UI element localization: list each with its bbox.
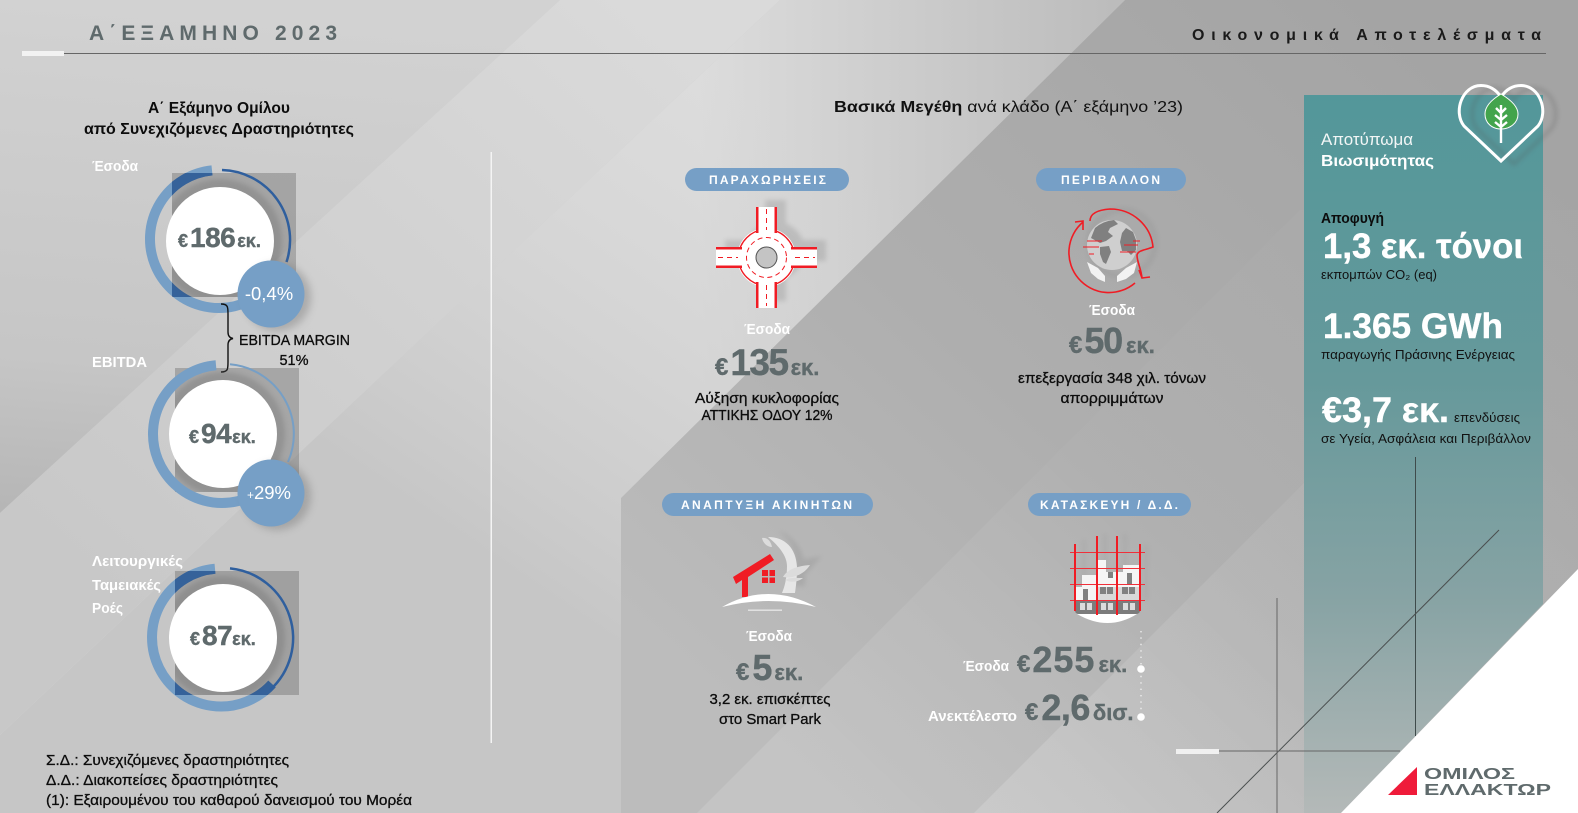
center heading: Βασικά Μεγέθη ανά κλάδο (Α΄ εξάμηνο ’23) [834, 99, 1183, 116]
logo: Ellaktor group: ΟΜΙΛΟΣ [1424, 766, 1516, 783]
left column heading: Α΄ Εξάμηνο Ομίλου [148, 100, 290, 117]
stat: investments [1321, 391, 1531, 446]
header: left title: Α΄ΕΞΑΜΗΝΟ 2023 [89, 22, 337, 45]
metric: EBITDA ring [92, 354, 311, 530]
left column heading [84, 100, 354, 138]
stat: investments: €3,7 εκ. [1322, 391, 1449, 430]
stat: green energy [1321, 307, 1515, 362]
progress ring [153, 365, 264, 503]
teal background [1304, 95, 1543, 813]
stat: investments: σε Υγεία, Ασφάλεια και Περιβάλλον [1321, 431, 1531, 446]
backlog value: €2,6δισ. [1025, 687, 1134, 728]
thin arc [230, 568, 293, 690]
value: €94εκ. [189, 418, 256, 449]
thin arc [222, 170, 290, 262]
description [1018, 370, 1206, 407]
white disc [169, 584, 277, 692]
panel: real estate [662, 493, 873, 728]
label [92, 553, 183, 617]
panel: construction [928, 493, 1191, 728]
description: ΑΤΤΙΚΗΣ ΟΔΟΥ 12% [702, 407, 832, 424]
description: 3,2 εκ. επισκέπτες [710, 691, 830, 708]
stat: avoided emissions: Αποφυγή [1321, 211, 1384, 227]
label: Έσοδα [92, 158, 139, 175]
stat: green energy: παραγωγής Πράσινης Ενέργειας [1321, 347, 1515, 362]
metric: operating cash flow ring [92, 553, 299, 706]
footnotes: Δ.Δ.: Διακοπείσες δραστηριότητες [46, 772, 278, 789]
label: Λειτουργικές [92, 553, 183, 570]
footnotes: (1): Εξαιρουμένου του καθαρού δανεισμού του Μορέα [46, 792, 412, 809]
panel title [1321, 131, 1434, 170]
label: Ροές [92, 600, 123, 617]
logo: Ellaktor group [1388, 766, 1551, 799]
backlog label: Ανεκτέλεστο [928, 708, 1017, 725]
icon: roundabout [716, 200, 826, 308]
revenue value: €255εκ. [1017, 639, 1127, 680]
badge: +29% [247, 482, 291, 503]
revenue label: Έσοδα [963, 658, 1010, 675]
value: €5εκ. [736, 647, 803, 688]
pill: ΚΑΤΑΣΚΕΥΗ / Δ.Δ. [1040, 498, 1178, 512]
grey square [175, 571, 299, 695]
panel: concessions [685, 168, 849, 424]
header: right title: Οικονομικά Αποτελέσματα [1192, 27, 1541, 44]
vertical divider [490, 152, 492, 743]
icon: heart with leaf [1459, 86, 1556, 164]
stat: investments: επενδύσεις [1454, 410, 1520, 425]
value: €135εκ. [715, 342, 819, 383]
label: Έσοδα [746, 628, 793, 645]
stat: avoided emissions: εκπομπών CO₂ (eq) [1321, 267, 1437, 282]
grey square [175, 368, 299, 492]
left column heading: από Συνεχιζόμενες Δραστηριότητες [84, 121, 354, 138]
white disc [169, 380, 277, 488]
EBITDA margin brace and label: EBITDA MARGIN [239, 332, 350, 349]
label: EBITDA [92, 354, 147, 371]
icon: building under construction [1070, 534, 1146, 623]
icon: house and leaf [722, 530, 822, 611]
description: επεξεργασία 348 χιλ. τόνων [1018, 370, 1206, 387]
description: Αύξηση κυκλοφορίας [695, 390, 839, 407]
badge [238, 260, 311, 331]
panel title: Αποτύπωμα [1321, 131, 1413, 149]
label: Έσοδα [1089, 302, 1136, 319]
footnotes [46, 752, 412, 809]
panel title: Βιωσιμότητας [1321, 153, 1434, 170]
value: €186εκ. [178, 222, 261, 253]
panel: sustainability footprint [1304, 86, 1556, 813]
label: Έσοδα [744, 321, 791, 338]
EBITDA margin brace and label [221, 304, 350, 372]
header rule [22, 51, 1546, 56]
pill [1036, 168, 1186, 191]
pill: ΠΑΡΑΧΩΡΗΣΕΙΣ [709, 173, 826, 187]
badge [238, 460, 311, 530]
footnotes: Σ.Δ.: Συνεχιζόμενες δραστηριότητες [46, 752, 289, 769]
metric: revenue ring [92, 158, 311, 331]
pill [685, 168, 849, 191]
description [695, 390, 839, 424]
description [710, 691, 830, 728]
icon: globe with hands [1069, 209, 1155, 293]
badge: -0,4% [245, 283, 293, 304]
pill: ΠΕΡΙΒΑΛΛΟΝ [1061, 173, 1160, 187]
logo: Ellaktor group: ΕΛΛΑΚΤΩΡ [1424, 782, 1551, 799]
panel: environment [1018, 168, 1206, 407]
EBITDA margin brace and label: 51% [279, 353, 309, 369]
value: €50εκ. [1069, 320, 1155, 361]
label: Ταμειακές [92, 577, 161, 594]
pill: ΑΝΑΠΤΥΞΗ ΑΚΙΝΗΤΩΝ [681, 498, 852, 512]
stat: avoided emissions [1321, 211, 1523, 282]
description: στο Smart Park [719, 711, 821, 728]
decorative cross lines [1176, 457, 1499, 813]
progress ring [150, 170, 261, 308]
stat: green energy: 1.365 GWh [1323, 307, 1503, 346]
description: απορριμμάτων [1060, 390, 1164, 407]
dotted timeline [1137, 631, 1145, 721]
white disc [166, 187, 274, 295]
stat: avoided emissions: 1,3 εκ. τόνοι [1323, 227, 1523, 266]
grey square [172, 173, 296, 297]
pill [1028, 493, 1191, 516]
value: €87εκ. [190, 620, 256, 651]
progress ring [152, 569, 272, 706]
thin arc [230, 364, 294, 462]
pill [662, 493, 873, 516]
white corner triangle [1341, 569, 1578, 813]
